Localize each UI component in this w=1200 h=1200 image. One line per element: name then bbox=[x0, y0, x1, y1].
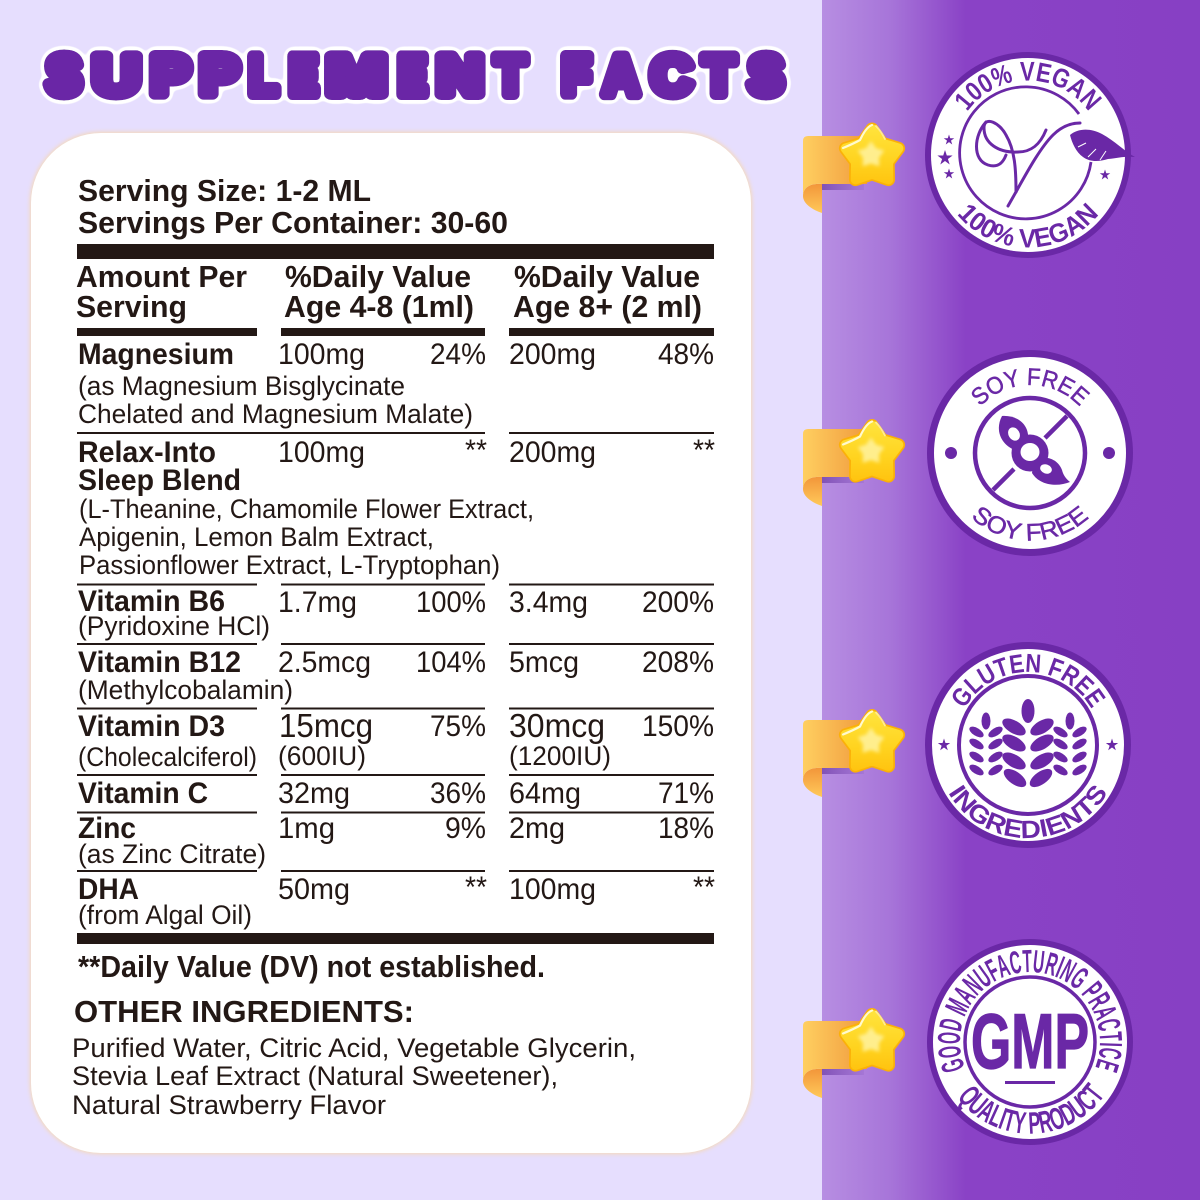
row: zinc: 9% bbox=[445, 812, 486, 845]
icon: script V with feather bbox=[976, 121, 1135, 206]
badge: gluten free ingredients: GLUTEN FREE bbox=[952, 654, 1106, 708]
row: zinc: 2mg bbox=[509, 812, 565, 845]
table header: amount per serving: Serving bbox=[76, 290, 187, 324]
left background bbox=[0, 0, 822, 1200]
row: zinc: 18% bbox=[658, 812, 714, 845]
icon: star ribbon 1 bbox=[803, 125, 899, 213]
GMP logotype bbox=[971, 997, 1089, 1085]
row: vitamin b6: 200% bbox=[642, 586, 714, 619]
title: M bbox=[327, 44, 386, 106]
title: S bbox=[46, 44, 82, 106]
row: zinc bbox=[78, 812, 714, 869]
icon: star ribbon 3 bbox=[803, 712, 899, 797]
badge: 100% vegan: 100% VEGAN bbox=[958, 202, 1098, 248]
icon: small stars bbox=[937, 134, 1110, 179]
row: vitamin d3 bbox=[78, 707, 714, 772]
badge: 100% vegan bbox=[925, 52, 1135, 258]
row: vitamin c: 71% bbox=[658, 777, 714, 810]
row: vitamin d3: 30mcg bbox=[509, 707, 605, 744]
row: dha: (from Algal Oil) bbox=[78, 900, 252, 930]
row: vitamin d3: (600IU) bbox=[278, 741, 366, 771]
row: relax-into sleep blend: Sleep Blend bbox=[78, 464, 241, 497]
badge: soy free: SOY FREE bbox=[973, 505, 1089, 541]
other ingredients list: Stevia Leaf Extract (Natural Sweetener), bbox=[72, 1061, 558, 1091]
table header: age 4-8 bbox=[281, 260, 485, 336]
row: magnesium: 200mg bbox=[509, 338, 596, 371]
badge: soy free: SOY FREE bbox=[972, 368, 1090, 406]
badge: gmp: QUALITY PRODUCT bbox=[958, 1082, 1102, 1134]
title: E bbox=[398, 44, 427, 106]
icon: star ribbon 4 bbox=[803, 1010, 899, 1098]
icon: crossed soybean pod bbox=[993, 416, 1070, 490]
row: relax-into sleep blend: (L-Theanine, Chamomile Flower Extract, bbox=[79, 494, 534, 524]
row: vitamin b12: (Methylcobalamin) bbox=[78, 675, 293, 705]
row: vitamin d3: Vitamin D3 bbox=[78, 710, 225, 743]
title: L bbox=[249, 44, 278, 106]
row: vitamin b12: 2.5mcg bbox=[278, 646, 371, 679]
serving information: Serving Size: 1-2 ML bbox=[78, 174, 371, 208]
row: vitamin b12 bbox=[78, 646, 714, 705]
row: zinc: 1mg bbox=[278, 812, 335, 845]
table header: age 4-8: %Daily Value bbox=[285, 260, 471, 294]
row: dha: 50mg bbox=[278, 873, 350, 906]
GMP logotype: GMP bbox=[971, 997, 1089, 1085]
row: vitamin b6: 3.4mg bbox=[509, 586, 588, 619]
title: T bbox=[703, 44, 735, 106]
table header: age 8+ bbox=[509, 260, 714, 336]
title: A bbox=[603, 44, 639, 106]
row: magnesium: 48% bbox=[658, 338, 714, 371]
row: zinc: Zinc bbox=[78, 812, 136, 845]
row: magnesium: (as Magnesium Bisglycinate bbox=[78, 371, 405, 401]
table header: amount per serving bbox=[76, 260, 257, 336]
badge: gluten free ingredients bbox=[925, 642, 1131, 848]
title: F bbox=[562, 44, 591, 106]
row: relax-into sleep blend: 100mg bbox=[278, 436, 365, 469]
row: vitamin b6: Vitamin B6 bbox=[78, 585, 225, 618]
title: T bbox=[495, 44, 526, 106]
right purple panel bbox=[822, 0, 1200, 1200]
badge: gmp: GOOD MANUFACTURING PRACTICE bbox=[938, 950, 1122, 1074]
row: vitamin c: 64mg bbox=[509, 777, 581, 810]
serving information bbox=[78, 174, 508, 240]
other ingredients heading: OTHER INGREDIENTS: bbox=[74, 995, 414, 1029]
row: vitamin c: Vitamin C bbox=[78, 777, 208, 810]
row: vitamin b6: 1.7mg bbox=[278, 586, 357, 619]
title: P bbox=[151, 44, 190, 106]
row: vitamin d3: (1200IU) bbox=[509, 741, 611, 771]
badge: soy free bbox=[927, 350, 1133, 556]
row: magnesium bbox=[78, 338, 714, 429]
other ingredients list bbox=[72, 1033, 636, 1120]
row: dha: DHA bbox=[78, 873, 139, 906]
row: vitamin b6: (Pyridoxine HCl) bbox=[78, 611, 270, 641]
row: magnesium: 24% bbox=[430, 338, 486, 371]
badge: gmp bbox=[927, 939, 1133, 1145]
row: vitamin c bbox=[78, 777, 714, 810]
row: dha bbox=[78, 871, 715, 930]
row: vitamin d3: 75% bbox=[430, 710, 486, 743]
row: relax-into sleep blend: ** bbox=[465, 434, 487, 467]
badge: gluten free ingredients: INGREDIENTS bbox=[949, 784, 1106, 838]
row: vitamin c: 36% bbox=[430, 777, 486, 810]
row: relax-into sleep blend bbox=[78, 434, 715, 580]
other ingredients list: Purified Water, Citric Acid, Vegetable Glycerin, bbox=[72, 1033, 636, 1063]
row: dha: ** bbox=[693, 871, 715, 904]
table header: amount per serving: Amount Per bbox=[76, 260, 247, 294]
row: magnesium: Chelated and Magnesium Malate) bbox=[78, 399, 473, 429]
title: N bbox=[437, 44, 483, 106]
title: C bbox=[651, 44, 692, 106]
row: relax-into sleep blend: Apigenin, Lemon Balm Extract, bbox=[79, 522, 434, 552]
row: zinc: (as Zinc Citrate) bbox=[78, 839, 266, 869]
row: vitamin c: 32mg bbox=[278, 777, 350, 810]
row: relax-into sleep blend: Passionflower Extract, L-Tryptophan) bbox=[79, 550, 500, 580]
nutrition table bbox=[76, 244, 715, 944]
title: U bbox=[93, 44, 140, 106]
row: vitamin b6 bbox=[78, 585, 714, 641]
row: magnesium: 100mg bbox=[278, 338, 365, 371]
row: vitamin d3: 150% bbox=[642, 710, 714, 743]
row: dha: 100mg bbox=[509, 873, 596, 906]
row: relax-into sleep blend: Relax-Into bbox=[78, 436, 216, 469]
title: S bbox=[748, 44, 784, 106]
other ingredients list: Natural Strawberry Flavor bbox=[72, 1090, 386, 1120]
serving information: Servings Per Container: 30-60 bbox=[78, 206, 508, 240]
row: vitamin d3: 15mcg bbox=[279, 707, 373, 744]
row: relax-into sleep blend: ** bbox=[693, 434, 715, 467]
badge: 100% vegan: 100% VEGAN bbox=[956, 62, 1102, 111]
title: P bbox=[200, 44, 239, 106]
table header: age 8+: %Daily Value bbox=[514, 260, 700, 294]
panel: supplement facts card bbox=[30, 132, 752, 1154]
row: relax-into sleep blend: 200mg bbox=[509, 436, 596, 469]
row: magnesium: Magnesium bbox=[78, 338, 234, 371]
icon: wheat stalks bbox=[968, 699, 1088, 791]
table header: age 4-8: Age 4-8 (1ml) bbox=[284, 290, 474, 324]
row: vitamin b12: 5mcg bbox=[509, 646, 579, 679]
title: E bbox=[289, 44, 318, 106]
table header: age 8+: Age 8+ (2 ml) bbox=[513, 290, 702, 324]
row: vitamin b6: 100% bbox=[416, 586, 486, 619]
icon: star ribbon 2 bbox=[803, 422, 899, 506]
row: vitamin b12: Vitamin B12 bbox=[78, 646, 241, 679]
row: vitamin b12: 208% bbox=[642, 646, 714, 679]
row: vitamin b12: 104% bbox=[416, 646, 486, 679]
row: dha: ** bbox=[465, 871, 487, 904]
footnote: **Daily Value (DV) not established. bbox=[78, 950, 545, 984]
row: vitamin d3: (Cholecalciferol) bbox=[78, 742, 257, 772]
